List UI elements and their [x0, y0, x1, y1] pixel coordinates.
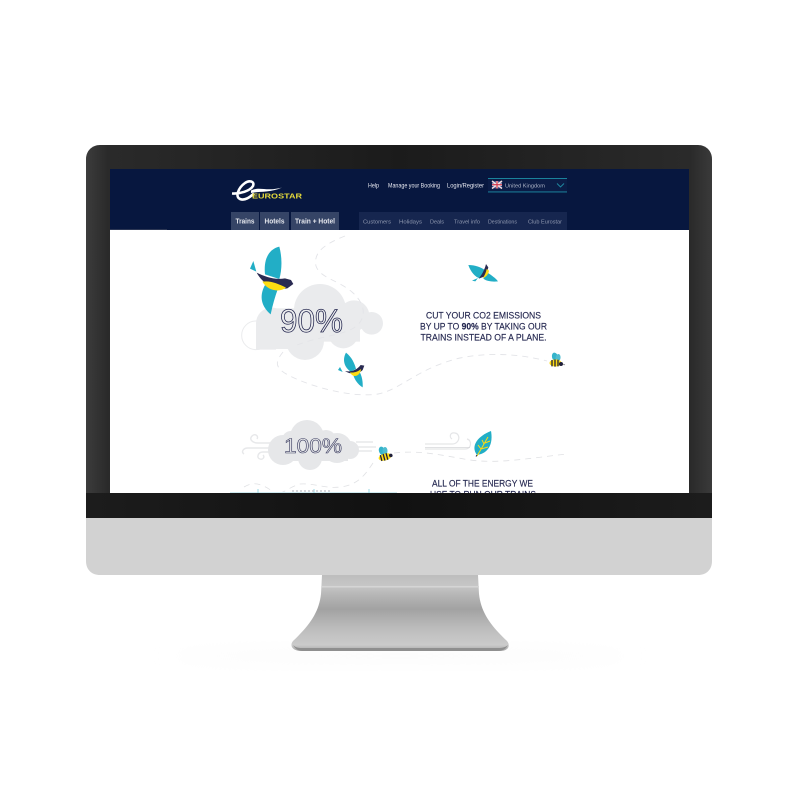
text: CO2 emissions: CUT YOUR CO2 EMISSIONS	[426, 310, 541, 322]
wind lines near leaf	[425, 433, 471, 449]
dashed bee path	[244, 452, 567, 493]
monitor chin	[86, 518, 712, 575]
site header	[110, 169, 689, 230]
stat: 90%: 90%	[280, 303, 343, 339]
text: CO2 emissions: TRAINS INSTEAD OF A PLANE.	[420, 332, 546, 344]
icon: small bird	[338, 353, 364, 387]
stat: 100%: 100%	[284, 435, 342, 458]
secondary navigation: Holidays	[399, 220, 422, 226]
text: renewable energy: USE TO RUN OUR TRAINS	[430, 490, 536, 500]
dashed flight path	[277, 236, 547, 395]
booking tabs: Hotels	[264, 218, 285, 226]
icon: bee	[550, 352, 565, 367]
monitor stand	[291, 575, 509, 651]
top navigation links: Help	[368, 182, 379, 190]
secondary navigation: Club Eurostar	[528, 220, 562, 226]
cloud	[268, 420, 359, 470]
logo: EUROSTAR	[252, 192, 303, 200]
clipped landscape line	[230, 489, 397, 493]
section: 100 percent cloud illustration	[230, 420, 564, 493]
secondary navigation: Deals	[430, 220, 444, 226]
icon: bird top right	[468, 264, 498, 282]
text: CO2 emissions	[420, 312, 547, 341]
secondary navigation: Destinations	[488, 220, 517, 226]
booking tabs	[231, 212, 339, 230]
country selector: United Kingdom	[505, 184, 545, 190]
secondary navigation: Customers	[363, 220, 391, 226]
logo	[232, 181, 303, 200]
booking tabs: Trains	[236, 218, 255, 226]
section: flying bird and 90 percent text	[420, 264, 565, 367]
booking tabs: Train + Hotel	[295, 218, 335, 226]
top navigation links: Login/Register	[447, 182, 485, 190]
infographic: desktop monitor showing Eurostar page	[86, 145, 712, 651]
secondary navigation: Travel info	[454, 220, 480, 226]
icon: UK flag	[492, 181, 502, 188]
top navigation links	[368, 183, 484, 189]
icon: large bird	[250, 247, 293, 314]
icon: bee	[378, 446, 393, 462]
icon: leaf	[474, 431, 492, 456]
stand shadow	[170, 651, 630, 661]
secondary navigation	[359, 212, 567, 230]
top navigation links: Manage your Booking	[388, 182, 440, 190]
wind lines left and right of cloud	[243, 435, 376, 459]
section: 90 percent cloud illustration	[242, 236, 547, 395]
cloud	[242, 284, 383, 360]
screen	[110, 169, 689, 500]
text: renewable energy	[430, 480, 536, 493]
text: CO2 emissions: BY UP TO 90% BY TAKING OUR	[420, 322, 547, 332]
text: renewable energy: ALL OF THE ENERGY WE	[432, 478, 533, 490]
country selector	[488, 178, 567, 192]
monitor bezel	[86, 145, 712, 518]
